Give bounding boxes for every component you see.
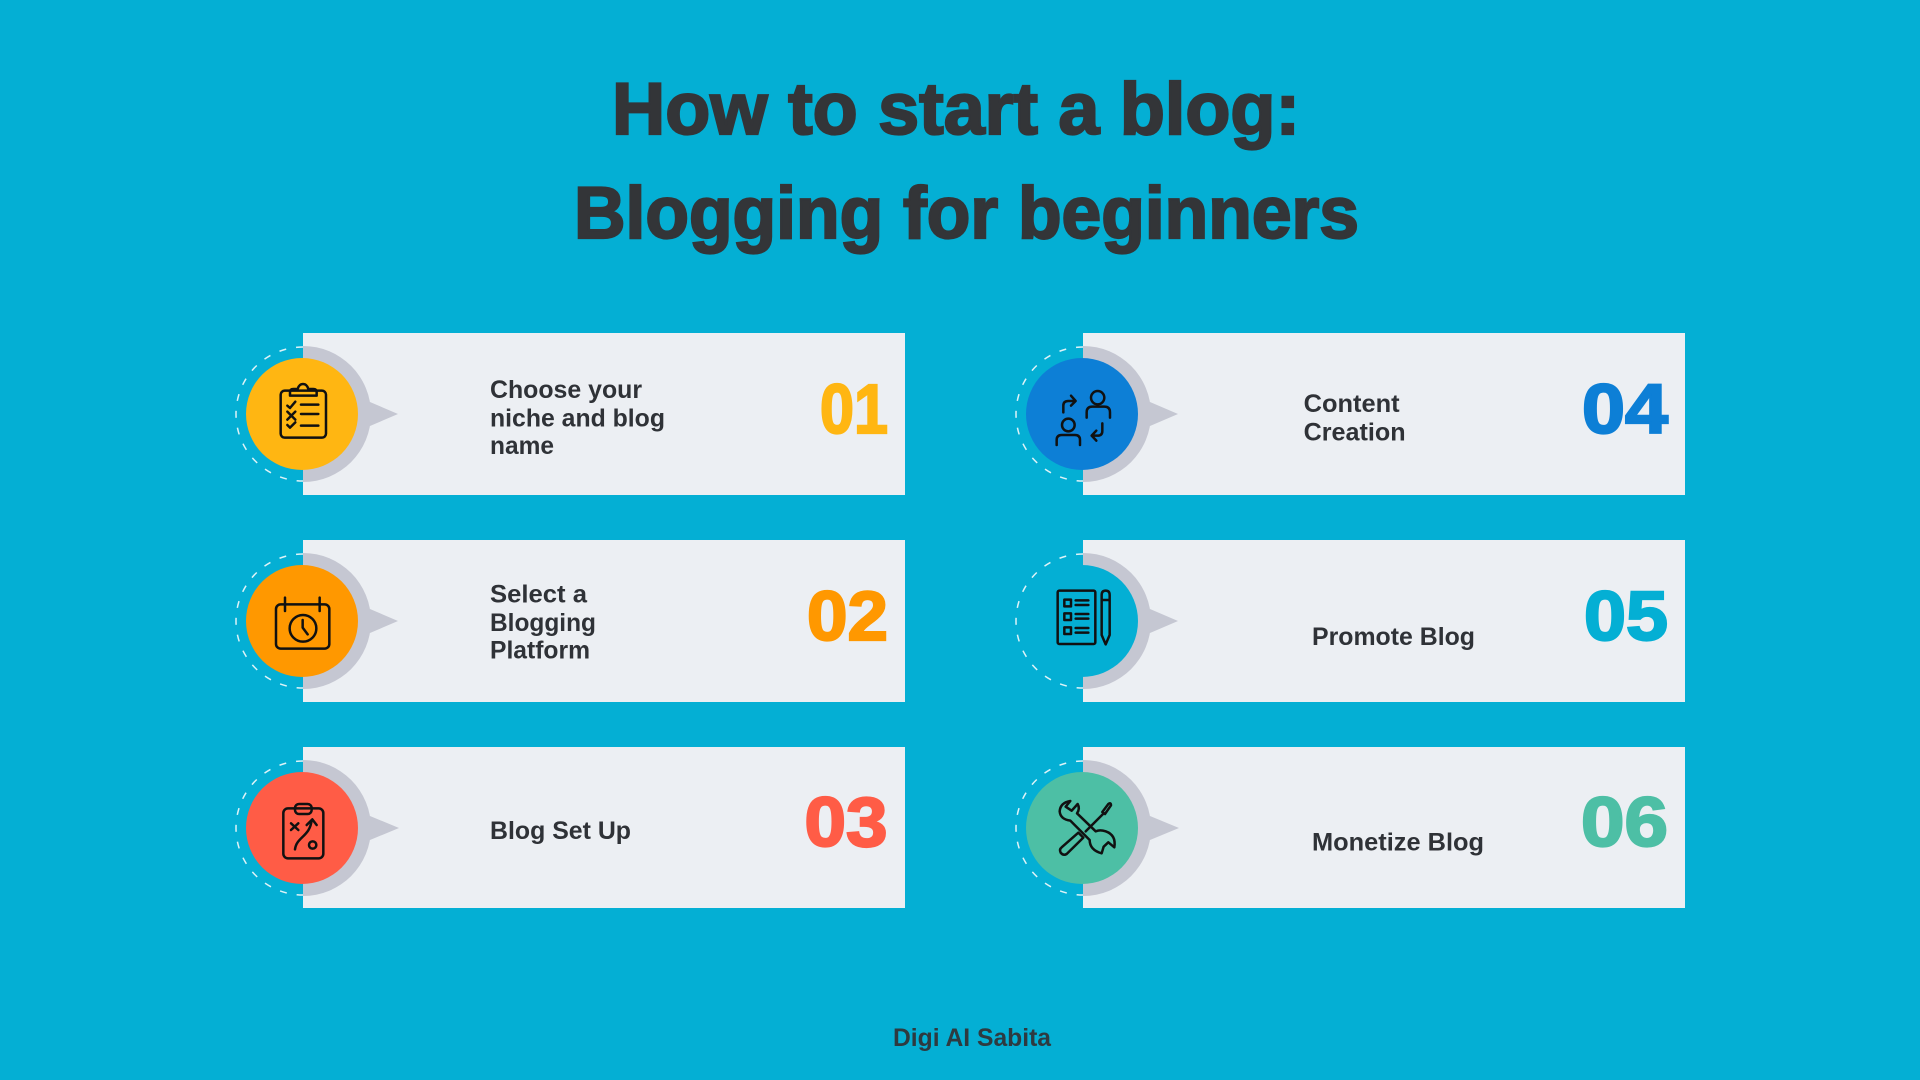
panel: step 03 blog set up	[236, 747, 905, 908]
text: content creation: Content	[1304, 390, 1400, 418]
footer credit: Digi AI Sabita	[893, 1024, 1052, 1052]
badge: green circle with pointer	[1016, 760, 1179, 896]
text: promote blog: Promote Blog	[1312, 623, 1475, 651]
text: content creation: Creation	[1304, 419, 1406, 447]
panel: step 05 promote blog	[1016, 540, 1685, 702]
text: blog set up: Blog Set Up	[490, 817, 631, 845]
text: select a blogging platform: Select a	[490, 581, 588, 609]
title	[574, 69, 1359, 254]
icon: clipboard checklist	[281, 384, 326, 438]
card background	[303, 747, 905, 908]
panel: step 02 select platform	[236, 540, 905, 702]
icon: people exchange	[1057, 391, 1110, 445]
number 05: 05	[1584, 577, 1668, 655]
panel: step 01 choose niche	[236, 333, 905, 495]
text: choose your niche: name	[490, 432, 554, 460]
text: choose your niche	[490, 376, 665, 460]
card background	[1083, 333, 1685, 495]
icon: calendar clock	[276, 598, 329, 649]
badge: orange circle with pointer	[236, 553, 398, 689]
icon: strategy clipboard	[283, 804, 323, 858]
title: Blogging for beginners	[574, 173, 1359, 254]
number 06: 06	[1581, 783, 1668, 861]
title: How to start a blog:	[612, 69, 1300, 150]
number 04: 04	[1582, 370, 1668, 448]
text: choose your niche: Choose your	[490, 376, 642, 404]
text: content creation	[1304, 390, 1406, 447]
number 02: 02	[807, 577, 888, 655]
icon: wrench and screwdriver	[1060, 801, 1115, 855]
text: select a blogging platform: Blogging	[490, 609, 596, 637]
text: choose your niche: niche and blog	[490, 404, 665, 432]
text: monetize blog: Monetize Blog	[1312, 829, 1484, 857]
number 01: 01	[820, 370, 888, 448]
badge: cyan circle with pointer	[1016, 553, 1178, 689]
badge: blue circle with pointer	[1016, 346, 1178, 482]
text: select a blogging platform	[490, 581, 596, 665]
card background	[303, 540, 905, 702]
number 03: 03	[804, 783, 888, 861]
panel: step 04 content creation	[1016, 333, 1685, 495]
badge: yellow circle with pointer	[236, 346, 398, 482]
card background	[1083, 747, 1685, 908]
panel: step 06 monetize blog	[1016, 747, 1685, 908]
text: select a blogging platform: Platform	[490, 637, 590, 665]
card background	[1083, 540, 1685, 702]
icon: list and pencil	[1058, 591, 1110, 644]
card background	[303, 333, 905, 495]
badge: red circle with pointer	[236, 760, 399, 896]
